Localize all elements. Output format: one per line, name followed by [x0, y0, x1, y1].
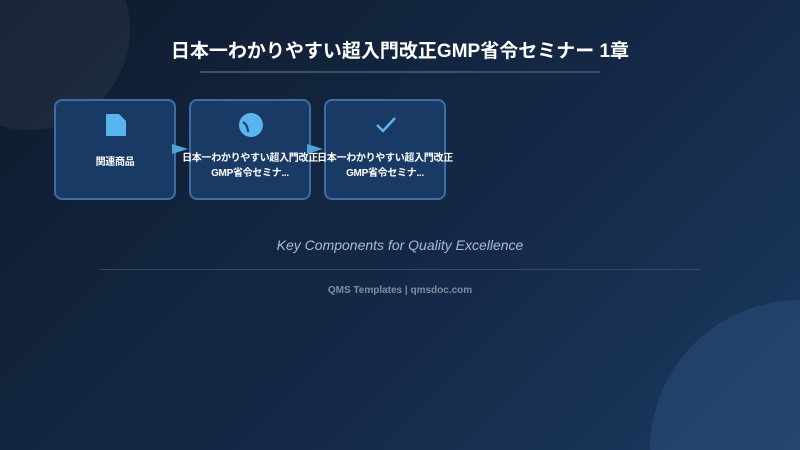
- icon: document: [106, 114, 126, 136]
- footer: QMS Templates | qmsdoc.com: [328, 285, 472, 296]
- card 3: [324, 99, 446, 200]
- icon: check: [376, 117, 396, 133]
- card 1: [54, 99, 176, 200]
- arrow 1: [172, 144, 188, 154]
- arrow 2: [307, 144, 323, 154]
- subtitle: Key Components for Quality Excellence: [277, 237, 523, 253]
- card 3: 日本一わかりやすい超入門改正: [317, 153, 453, 164]
- card 1: 関連商品: [96, 157, 134, 168]
- title: 日本一わかりやすい超入門改正GMP省令セミナー 1章: [171, 41, 629, 62]
- card 3: GMP省令セミナ...: [346, 168, 424, 179]
- icon: leaf circle: [239, 113, 263, 137]
- card 2: 日本一わかりやすい超入門改正: [182, 153, 318, 164]
- card 2: GMP省令セミナ...: [211, 168, 289, 179]
- card 2: [189, 99, 311, 200]
